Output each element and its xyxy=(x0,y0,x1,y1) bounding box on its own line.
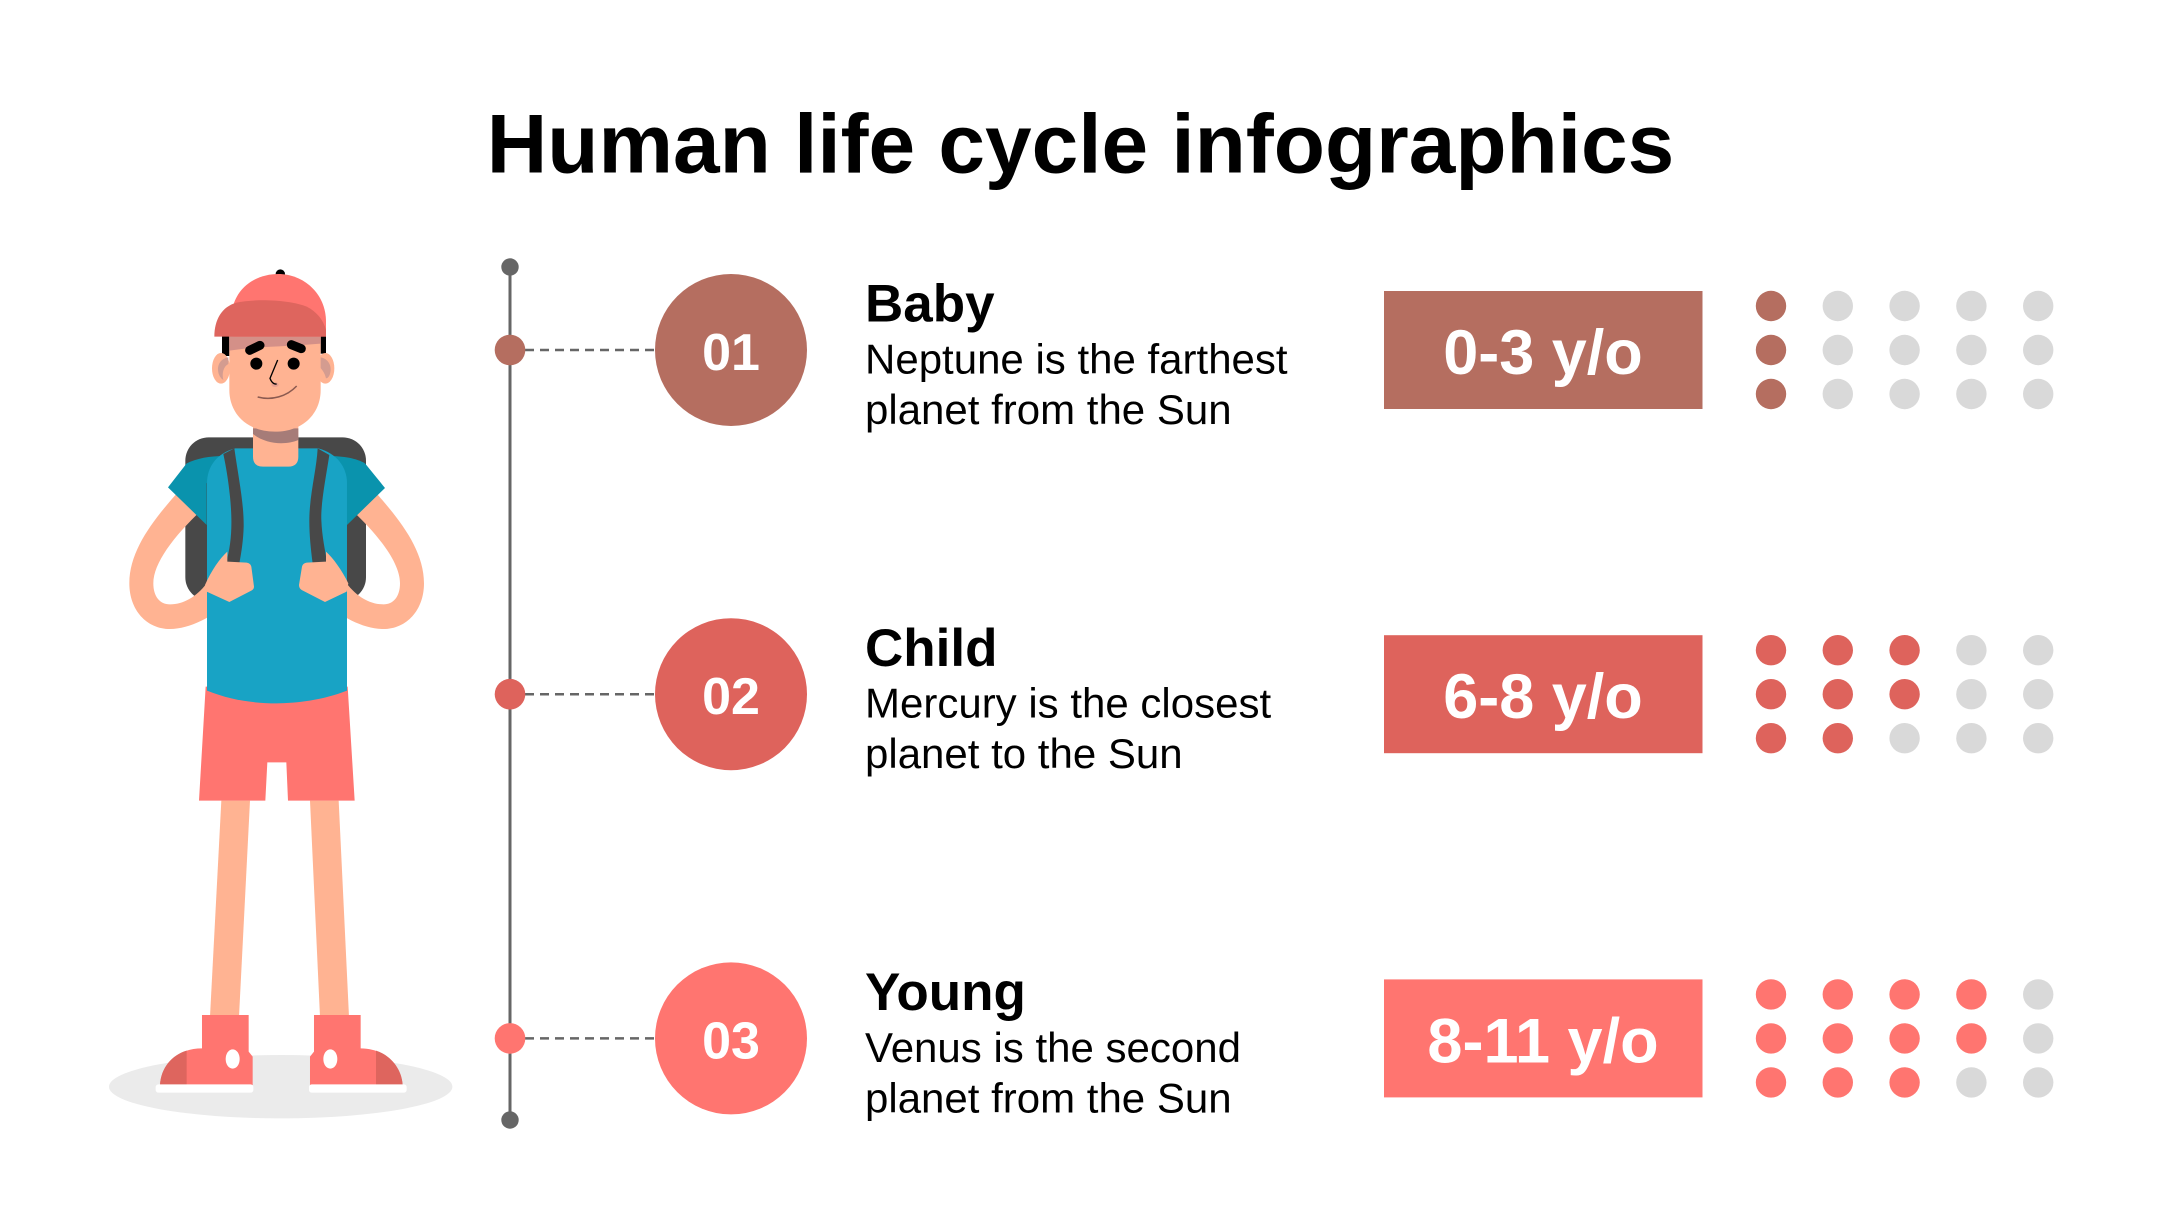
number badge 01: 01 xyxy=(702,324,760,382)
age box 8-11: 8-11 y/o xyxy=(1427,1006,1659,1076)
age box 0-3 xyxy=(1384,291,1702,409)
description Young: Venus is the second xyxy=(865,1024,1241,1071)
dot scale 1 xyxy=(1756,291,2053,409)
row 3: Young xyxy=(495,962,2053,1121)
description Child: Mercury is the closest xyxy=(865,680,1271,727)
description Child: planet to the Sun xyxy=(865,730,1183,777)
row 1: Baby xyxy=(495,274,2053,433)
row 2: Child xyxy=(495,618,2053,777)
character legs and shorts xyxy=(156,687,407,1093)
number badge 02 xyxy=(655,618,807,770)
number badge 01 xyxy=(655,274,807,426)
dot scale 2 xyxy=(1756,635,2053,753)
number badge 03: 03 xyxy=(702,1012,760,1070)
description Baby: planet from the Sun xyxy=(865,386,1232,433)
age box 0-3: 0-3 y/o xyxy=(1443,318,1643,388)
character illustration xyxy=(109,269,452,1118)
heading Young: Young xyxy=(865,963,1026,1022)
number badge 03 xyxy=(655,962,807,1114)
timeline marker and connector 03 xyxy=(495,1023,657,1054)
age box 8-11 xyxy=(1384,979,1702,1097)
timeline marker and connector 02 xyxy=(495,679,657,710)
heading Child: Child xyxy=(865,619,997,678)
number badge 02: 02 xyxy=(702,668,760,726)
description Young: planet from the Sun xyxy=(865,1074,1232,1121)
ground shadow xyxy=(109,1055,452,1118)
character torso and head xyxy=(129,269,424,703)
timeline xyxy=(501,258,519,1129)
age box 6-8: 6-8 y/o xyxy=(1443,662,1643,732)
heading Baby: Baby xyxy=(865,275,995,334)
title: Human life cycle infographics xyxy=(487,97,1674,191)
age box 6-8 xyxy=(1384,635,1702,753)
description Baby: Neptune is the farthest xyxy=(865,335,1288,382)
timeline marker and connector 01 xyxy=(495,335,657,365)
dot scale 3 xyxy=(1756,979,2053,1098)
